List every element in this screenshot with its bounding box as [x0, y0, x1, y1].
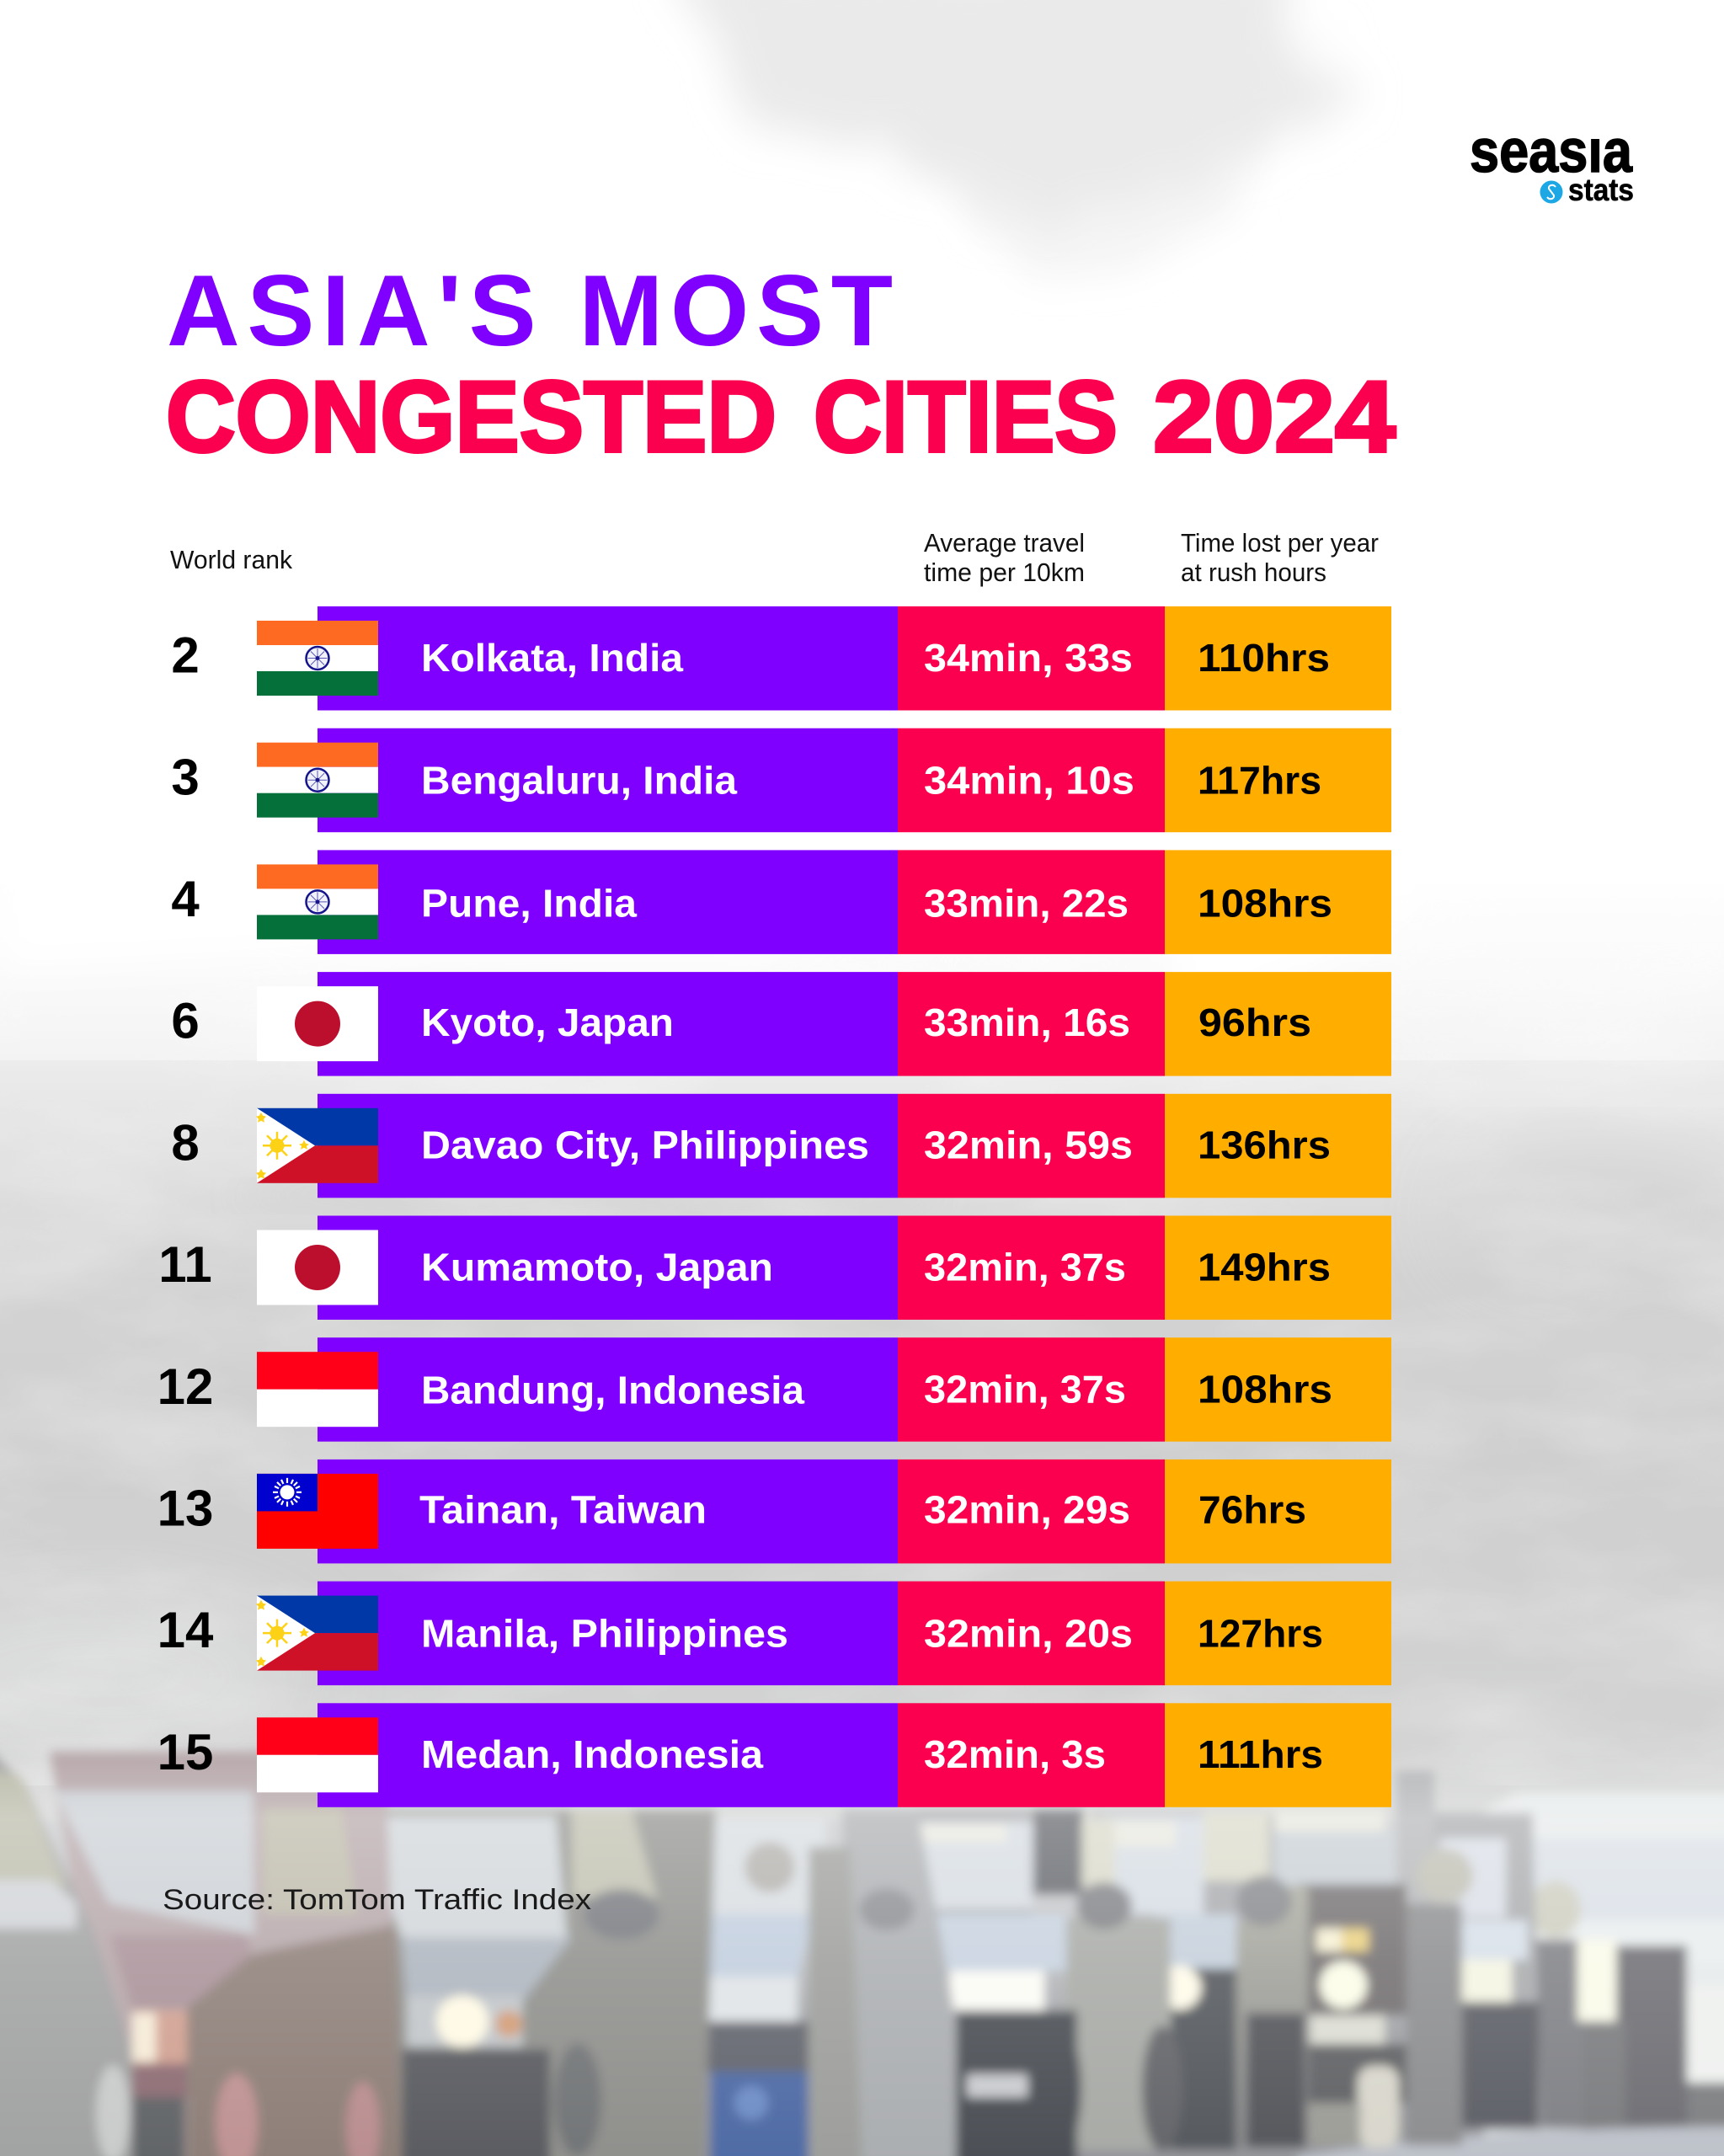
- flag: Philippines: [256, 1108, 378, 1183]
- left-most car: [0, 1743, 132, 2156]
- rank number: 12: [157, 1358, 213, 1415]
- city name: Manila, Philippines: [421, 1612, 788, 1656]
- row: rank 11 Kumamoto: [158, 1216, 1391, 1320]
- cloud of smoke at top: [674, 0, 1339, 278]
- flag: Indonesia: [257, 1352, 378, 1427]
- flag: Japan: [257, 1230, 378, 1305]
- rank number: 2: [171, 627, 200, 684]
- hours lost: 117hrs: [1198, 759, 1321, 803]
- hours lost: 108hrs: [1198, 881, 1332, 925]
- row: rank 6 Kyoto: [171, 972, 1391, 1076]
- travel time: 32min, 37s: [924, 1245, 1126, 1289]
- flag: India: [257, 864, 378, 939]
- blue car: [654, 1819, 862, 2156]
- hours lost: 108hrs: [1198, 1368, 1332, 1412]
- flag: Philippines: [256, 1596, 378, 1671]
- silver car: [358, 1811, 716, 2156]
- city name: Kyoto, Japan: [421, 1001, 674, 1044]
- column header: average travel time: Average travel: [924, 528, 1085, 558]
- city name: Medan, Indonesia: [421, 1732, 763, 1776]
- row: rank 15 Medan: [157, 1703, 1391, 1807]
- jeep: [1267, 1771, 1473, 2148]
- column header: time lost: at rush hours: [1181, 558, 1326, 587]
- title line 2: 2024: [1153, 360, 1396, 473]
- first grey car of right half: [842, 1811, 956, 2156]
- column header: time lost: Time lost per year: [1181, 528, 1379, 558]
- travel time: 33min, 16s: [924, 1001, 1130, 1044]
- flag: Taiwan: [257, 1474, 378, 1549]
- red car: [50, 1752, 402, 2156]
- city name: Kumamoto, Japan: [421, 1245, 773, 1289]
- title line 2: CITIES: [814, 360, 1118, 473]
- row: rank 2 Kolkata: [171, 606, 1391, 711]
- travel time: 33min, 22s: [924, 881, 1129, 925]
- middle car behind jeep: [1432, 1813, 1541, 2131]
- title line 2: CONGESTED: [166, 360, 777, 473]
- travel time: 32min, 29s: [924, 1487, 1130, 1531]
- row: rank 4 Pune: [171, 850, 1391, 954]
- city name: Davao City, Philippines: [421, 1123, 869, 1167]
- title line 1: ASIA'S MOST: [167, 254, 893, 367]
- title: [166, 254, 1396, 473]
- source note: Source: TomTom Traffic Index: [163, 1884, 591, 1916]
- travel time: 34min, 10s: [924, 759, 1134, 803]
- hours lost: 76hrs: [1198, 1487, 1306, 1531]
- column header: time lost: [1181, 528, 1379, 587]
- rank number: 15: [157, 1724, 213, 1780]
- title line 2: [166, 360, 1396, 473]
- background photo: line of cars in traffic: [0, 1743, 1724, 2156]
- row: rank 8 Davao City: [171, 1094, 1391, 1198]
- column header: world rank: World rank: [170, 545, 292, 574]
- city name: Kolkata, India: [421, 636, 683, 680]
- flag: Japan: [257, 986, 378, 1061]
- stats wordmark: stats: [1568, 173, 1634, 207]
- city name: Bengaluru, India: [421, 759, 737, 803]
- logo: seasia stats: [1470, 138, 1634, 204]
- hours lost: 136hrs: [1198, 1123, 1331, 1167]
- road: [1297, 2127, 1724, 2156]
- rank number: 4: [171, 871, 200, 927]
- hours lost: 127hrs: [1198, 1612, 1323, 1656]
- fifth car: [905, 1811, 1182, 2156]
- rank number: 3: [171, 749, 200, 805]
- city name: Bandung, Indonesia: [421, 1368, 804, 1412]
- hours lost: 111hrs: [1198, 1732, 1323, 1776]
- rank number: 6: [171, 993, 200, 1049]
- rank number: 11: [158, 1236, 212, 1293]
- travel time: 32min, 37s: [924, 1368, 1126, 1412]
- rank number: 8: [171, 1114, 200, 1171]
- fourth car: [1093, 1813, 1308, 2150]
- hours lost: 96hrs: [1198, 1001, 1311, 1044]
- column header: average travel time: [924, 528, 1085, 587]
- seasia wordmark: seasia: [1470, 118, 1633, 185]
- hours lost: 149hrs: [1198, 1245, 1331, 1289]
- travel time: 32min, 3s: [924, 1732, 1106, 1776]
- row: rank 12 Bandung: [157, 1337, 1391, 1442]
- icon: seasia circle: [1540, 180, 1563, 204]
- rank number: 13: [157, 1481, 213, 1536]
- flag: India: [257, 743, 378, 818]
- row: rank 3 Bengaluru: [171, 728, 1391, 832]
- rank number: 14: [157, 1602, 214, 1658]
- hours lost: 110hrs: [1198, 636, 1330, 680]
- row: rank 14 Manila: [157, 1582, 1391, 1685]
- city name: Tainan, Taiwan: [419, 1487, 707, 1531]
- travel time: 32min, 59s: [924, 1123, 1133, 1167]
- row: rank 13 Tainan: [157, 1460, 1391, 1563]
- travel time: 34min, 33s: [924, 636, 1133, 680]
- column header: average travel time: time per 10km: [924, 558, 1085, 587]
- flag: India: [257, 621, 378, 696]
- white car: [1484, 1792, 1724, 2156]
- travel time: 32min, 20s: [924, 1612, 1133, 1656]
- city name: Pune, India: [421, 881, 637, 925]
- haze over the cars: [0, 1735, 1724, 2156]
- flag: Indonesia: [257, 1717, 378, 1792]
